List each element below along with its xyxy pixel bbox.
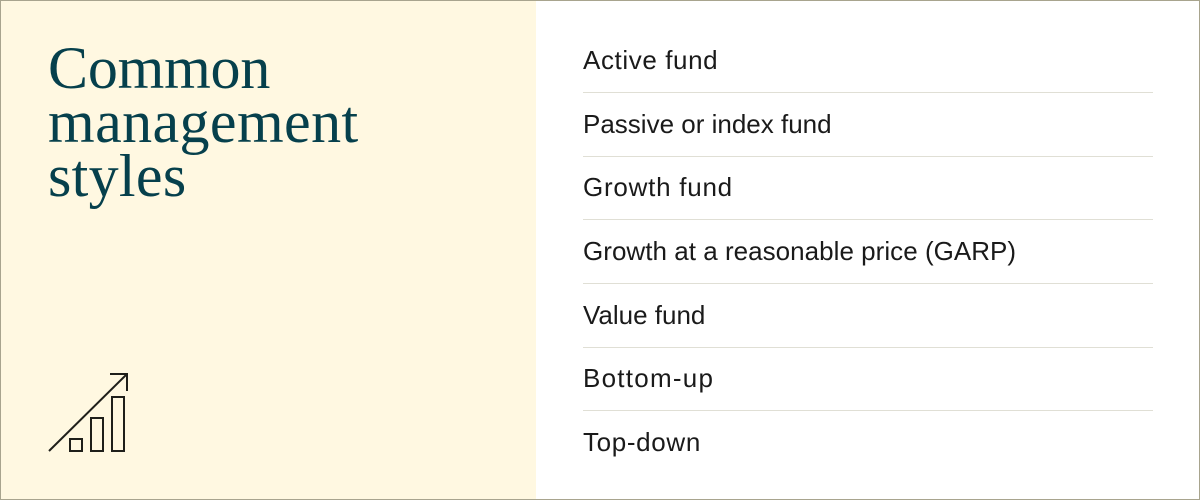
list item: Bottom-up: Bottom-up — [583, 363, 714, 393]
list item: Value fund: Value fund — [583, 300, 705, 330]
icon: rising bars with arrow — [48, 373, 128, 452]
panel: left title panel — [1, 1, 536, 499]
list item: Growth fund: Growth fund — [583, 172, 733, 202]
title — [48, 35, 359, 209]
title: Common — [48, 35, 270, 101]
list item: Passive or index fund: Passive or index fund — [583, 109, 832, 139]
list item: Top-down: Top-down — [583, 427, 701, 457]
title: management — [48, 89, 359, 155]
title: styles — [48, 143, 186, 209]
list item: Active fund: Active fund — [583, 45, 718, 75]
list item: Growth at a reasonable price (GARP): Growth at a reasonable price (GARP) — [583, 236, 1016, 266]
